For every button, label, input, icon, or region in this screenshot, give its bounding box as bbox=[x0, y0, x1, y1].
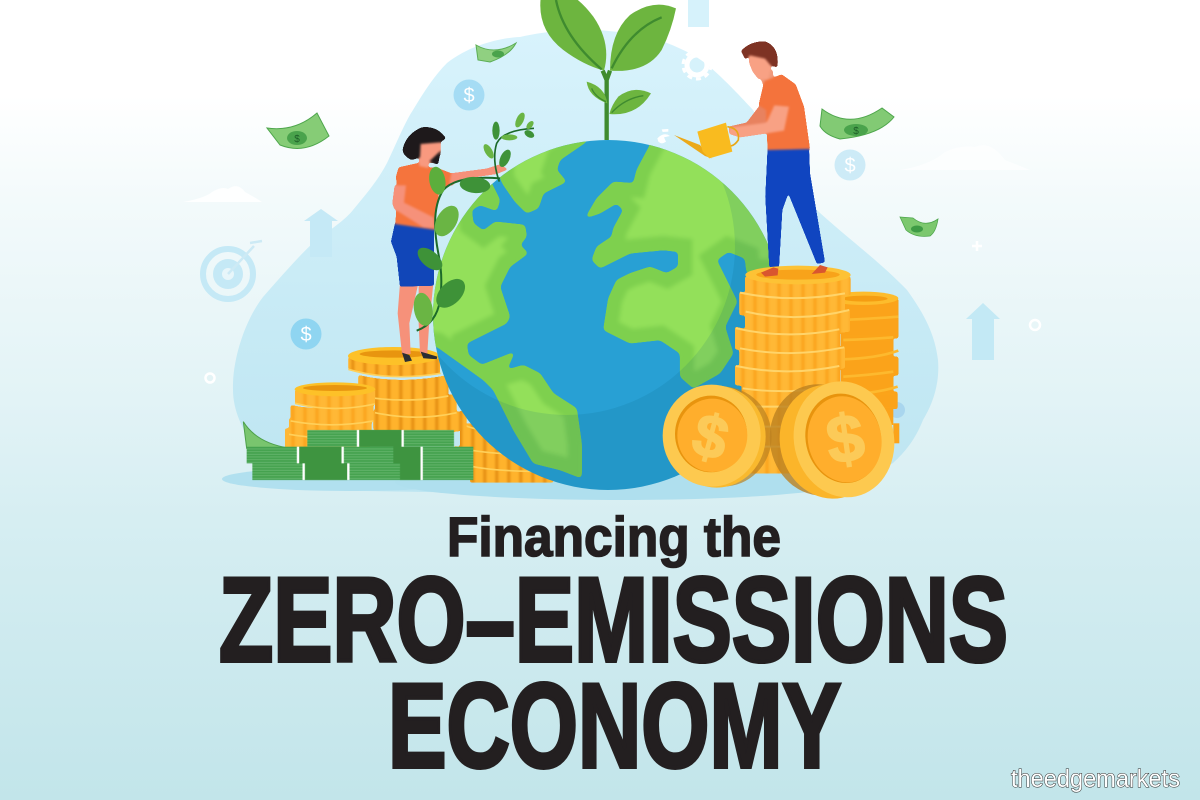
title line 1: Financing the bbox=[447, 505, 781, 568]
dollar badge left: $ bbox=[300, 324, 312, 346]
left big coin bbox=[663, 385, 772, 488]
woman extended arm bbox=[446, 164, 508, 187]
woman face bbox=[419, 141, 441, 168]
man hair bbox=[741, 41, 778, 67]
dollar badge left bbox=[290, 318, 322, 350]
left big leaf bbox=[540, 0, 606, 71]
bill behind stack bbox=[243, 422, 290, 448]
stack small bbox=[285, 382, 375, 450]
front coin stack bbox=[735, 266, 851, 473]
man figure bbox=[657, 41, 825, 267]
cloud right bbox=[900, 145, 1030, 170]
woman legs bbox=[398, 283, 433, 354]
cloud left bbox=[183, 186, 262, 202]
woman skirt bbox=[391, 223, 434, 287]
dollar badge right bbox=[834, 150, 866, 180]
arrow up left bbox=[304, 209, 338, 257]
flying bill left bbox=[267, 113, 329, 148]
plus sign bbox=[972, 241, 982, 251]
globe bbox=[415, 83, 858, 490]
small ring right bbox=[1030, 320, 1040, 330]
stack far right bbox=[455, 423, 553, 483]
continents bbox=[433, 141, 770, 478]
man back arm bbox=[729, 106, 767, 132]
title line 3: ECONOMY bbox=[388, 659, 841, 793]
money white straps bbox=[298, 430, 422, 480]
vine leaves bbox=[411, 111, 536, 327]
arrow up right bbox=[966, 303, 1000, 360]
woman bent arm bbox=[392, 185, 434, 228]
man shirt bbox=[759, 74, 810, 150]
man trousers bbox=[765, 148, 825, 267]
man face bbox=[749, 54, 771, 79]
flying bill top bbox=[476, 43, 516, 62]
man body bbox=[729, 41, 825, 267]
woman figure bbox=[391, 127, 508, 362]
woman shoes bbox=[402, 352, 437, 362]
money dark bands bbox=[299, 430, 421, 480]
small leaves bbox=[587, 82, 607, 103]
right big leaf bbox=[610, 5, 676, 71]
flying bill small right bbox=[900, 217, 938, 236]
stack large bbox=[348, 347, 467, 434]
woman shirt bbox=[395, 163, 451, 230]
dollar badge top: $ bbox=[463, 85, 475, 107]
watermark: theedgemarkets bbox=[1011, 765, 1180, 793]
ground shadow globe bbox=[395, 464, 845, 500]
flying bill right bbox=[820, 108, 894, 139]
coin stacks right bbox=[663, 265, 905, 508]
water drops bbox=[657, 129, 670, 143]
woman hair bbox=[403, 127, 446, 165]
flying bill right: $ bbox=[853, 126, 859, 137]
flying bill left: $ bbox=[294, 134, 300, 145]
ground shadow left bbox=[222, 467, 478, 491]
money stacks bbox=[247, 430, 473, 480]
dollar badge top bbox=[454, 80, 484, 110]
man neck bbox=[757, 70, 774, 85]
small ring left bbox=[206, 374, 214, 382]
coin stacks left bbox=[243, 347, 553, 483]
back orange stack bbox=[828, 292, 899, 443]
globe shading bbox=[438, 183, 770, 490]
gear icon bbox=[683, 51, 711, 79]
sprout on globe bbox=[540, 0, 676, 140]
right big coin: $ bbox=[822, 400, 869, 479]
background blob bbox=[233, 30, 938, 497]
dollar badge right: $ bbox=[844, 155, 856, 177]
arrow up top bbox=[688, 0, 709, 27]
left big coin: $ bbox=[686, 400, 735, 473]
right big coin bbox=[759, 372, 905, 508]
watering can bbox=[674, 123, 739, 158]
man front arm bbox=[729, 105, 789, 137]
target icon bbox=[203, 241, 262, 299]
vine bbox=[411, 111, 536, 331]
woman body bbox=[391, 127, 508, 287]
man shoes bbox=[761, 265, 828, 277]
gear behind coins bbox=[889, 402, 905, 418]
